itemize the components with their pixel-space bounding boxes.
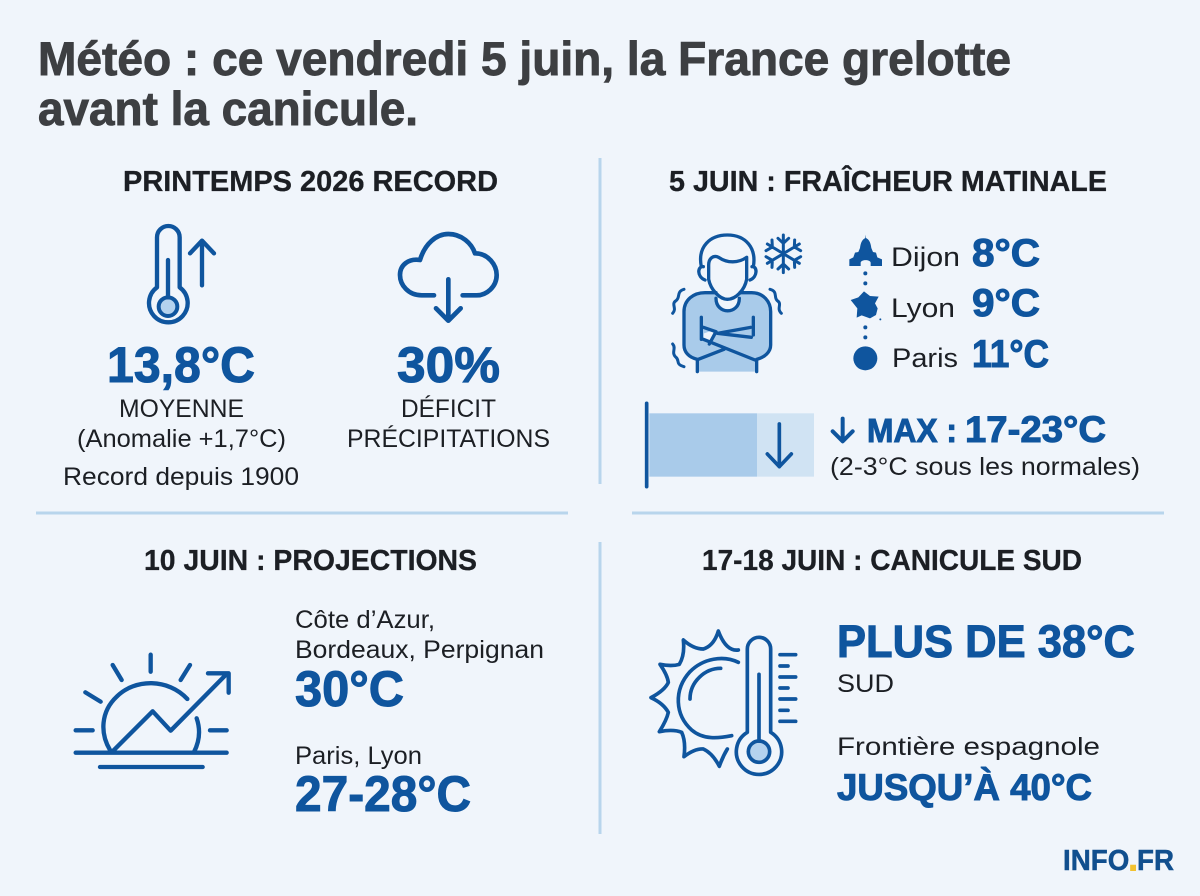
panel: printemps 2026 record (63, 166, 550, 491)
city temperatures: Dijon (891, 242, 960, 272)
city temperatures: Lyon (891, 293, 955, 323)
title: Météo : ce vendredi 5 juin, la France grelotte (38, 32, 1011, 85)
label: moyenne: MOYENNE (119, 395, 244, 423)
city temperatures (891, 232, 1049, 376)
title: avant la canicule. (38, 82, 418, 135)
text: côte d'azur (295, 606, 544, 664)
heading: projections: 10 JUIN : PROJECTIONS (144, 545, 477, 577)
text: paris lyon: Paris, Lyon (295, 742, 422, 770)
text: côte d'azur: Côte d’Azur, (295, 606, 435, 634)
icon: cloud with down arrow (400, 234, 497, 321)
stat: max 17-23°C: 17-23°C (965, 409, 1106, 450)
label: déficit précipitations (347, 394, 550, 453)
title (38, 32, 1011, 135)
stat: 30%: 30% (397, 337, 500, 393)
stat: 27-28°C: 27-28°C (295, 766, 471, 822)
label: déficit précipitations: PRÉCIPITATIONS (347, 424, 550, 453)
label: moyenne (63, 395, 299, 491)
city temperatures: 11°C (972, 333, 1049, 376)
heading: printemps: PRINTEMPS 2026 RECORD (123, 166, 498, 198)
city temperatures: 8°C (972, 232, 1040, 275)
label: sud: SUD (837, 670, 894, 698)
stat: 30°C: 30°C (295, 661, 404, 717)
heading: fraîcheur: 5 JUIN : FRAÎCHEUR MATINALE (669, 164, 1107, 198)
icon: thermometer with up arrow (149, 226, 214, 322)
label: frontière espagnole: Frontière espagnole (837, 733, 1100, 761)
label: moyenne: Record depuis 1900 (63, 463, 299, 491)
icon: sun rising with trend arrow (76, 655, 229, 767)
label: moyenne: (Anomalie +1,7°C) (77, 425, 286, 453)
stat: 13,8°C: 13,8°C (107, 337, 255, 393)
logo: info.fr: INFO.FR (1063, 845, 1174, 877)
stat: plus de 38°C: PLUS DE 38°C (837, 616, 1135, 667)
panel: 10 juin projections (76, 545, 544, 822)
stat: max 17-23°C: MAX : (867, 412, 957, 449)
arrow: max down (833, 419, 853, 441)
stat: max 17-23°C (867, 409, 1106, 450)
heading: canicule: 17-18 JUIN : CANICULE SUD (702, 545, 1082, 577)
note: sous les normales: (2-3°C sous les normales) (830, 453, 1140, 481)
city temperatures: Paris (892, 343, 958, 373)
icon: shivering person (673, 235, 781, 372)
icon: snowflake (766, 235, 801, 273)
panel: 17-18 juin canicule sud (651, 545, 1135, 808)
icon: sun and thermometer (651, 631, 796, 774)
chart: max temperature bar (647, 403, 814, 487)
stat: jusqu'à 40°C: JUSQU’À 40°C (837, 767, 1092, 808)
label: déficit précipitations: DÉFICIT (401, 394, 496, 423)
text: côte d'azur: Bordeaux, Perpignan (295, 636, 544, 664)
panel: 5 juin fraîcheur matinale (647, 164, 1140, 487)
icon: city route with dome, France and dot (849, 235, 882, 370)
city temperatures: 9°C (972, 282, 1040, 325)
